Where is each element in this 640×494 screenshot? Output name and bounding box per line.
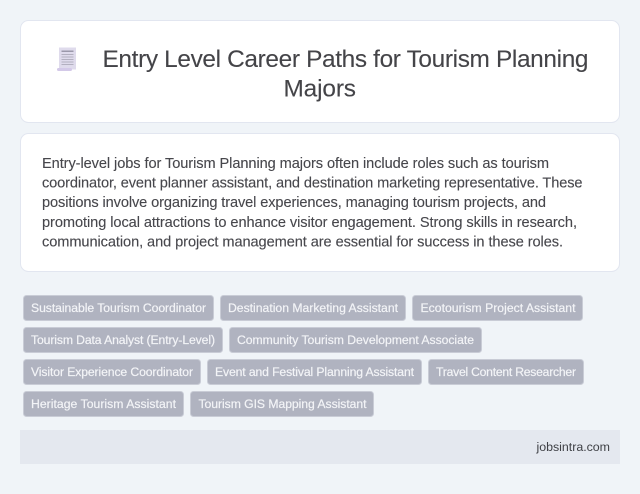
tag: Event and Festival Planning Assistant [215,365,415,379]
panel: description [20,134,620,272]
description text [42,156,582,250]
tag [230,328,482,352]
description text: promoting local attractions to enhance visitor engagement. Strong skills in research, [42,215,577,231]
tag [208,360,422,384]
heading line 2: Majors [284,76,356,102]
tag: Ecotourism Project Assistant [420,301,576,315]
description text: positions involve organizing travel experiences, managing tourism projects, and [42,195,546,211]
panel: header [20,20,620,122]
footer [20,430,620,464]
tag [412,296,582,320]
tag: Community Tourism Development Associate [237,333,474,347]
tag [24,328,222,352]
tag: Visitor Experience Coordinator [31,365,193,379]
tag: Tourism Data Analyst (Entry-Level) [31,333,215,347]
tag: Heritage Tourism Assistant [31,397,177,411]
heading line 1: Entry Level Career Paths for Tourism Planning [102,46,588,73]
tag [190,392,374,416]
description text: communication, and project management are essential for success in these roles. [42,234,563,250]
footer source: jobsintra.com [536,440,610,454]
tag: Sustainable Tourism Coordinator [31,301,206,315]
description text: Entry-level jobs for Tourism Planning majors often include roles such as tourism [42,156,549,172]
tag: Destination Marketing Assistant [228,301,399,315]
icon: document scroll [57,48,76,71]
tag [428,360,584,384]
tag [220,296,406,320]
tag: Tourism GIS Mapping Assistant [198,397,367,411]
tag [24,392,184,416]
description text: coordinator, event planner assistant, and destination marketing representative. These [42,176,582,192]
tag [24,360,200,384]
tag [24,296,214,320]
tag: Travel Content Researcher [436,365,576,379]
tag list [24,296,584,416]
